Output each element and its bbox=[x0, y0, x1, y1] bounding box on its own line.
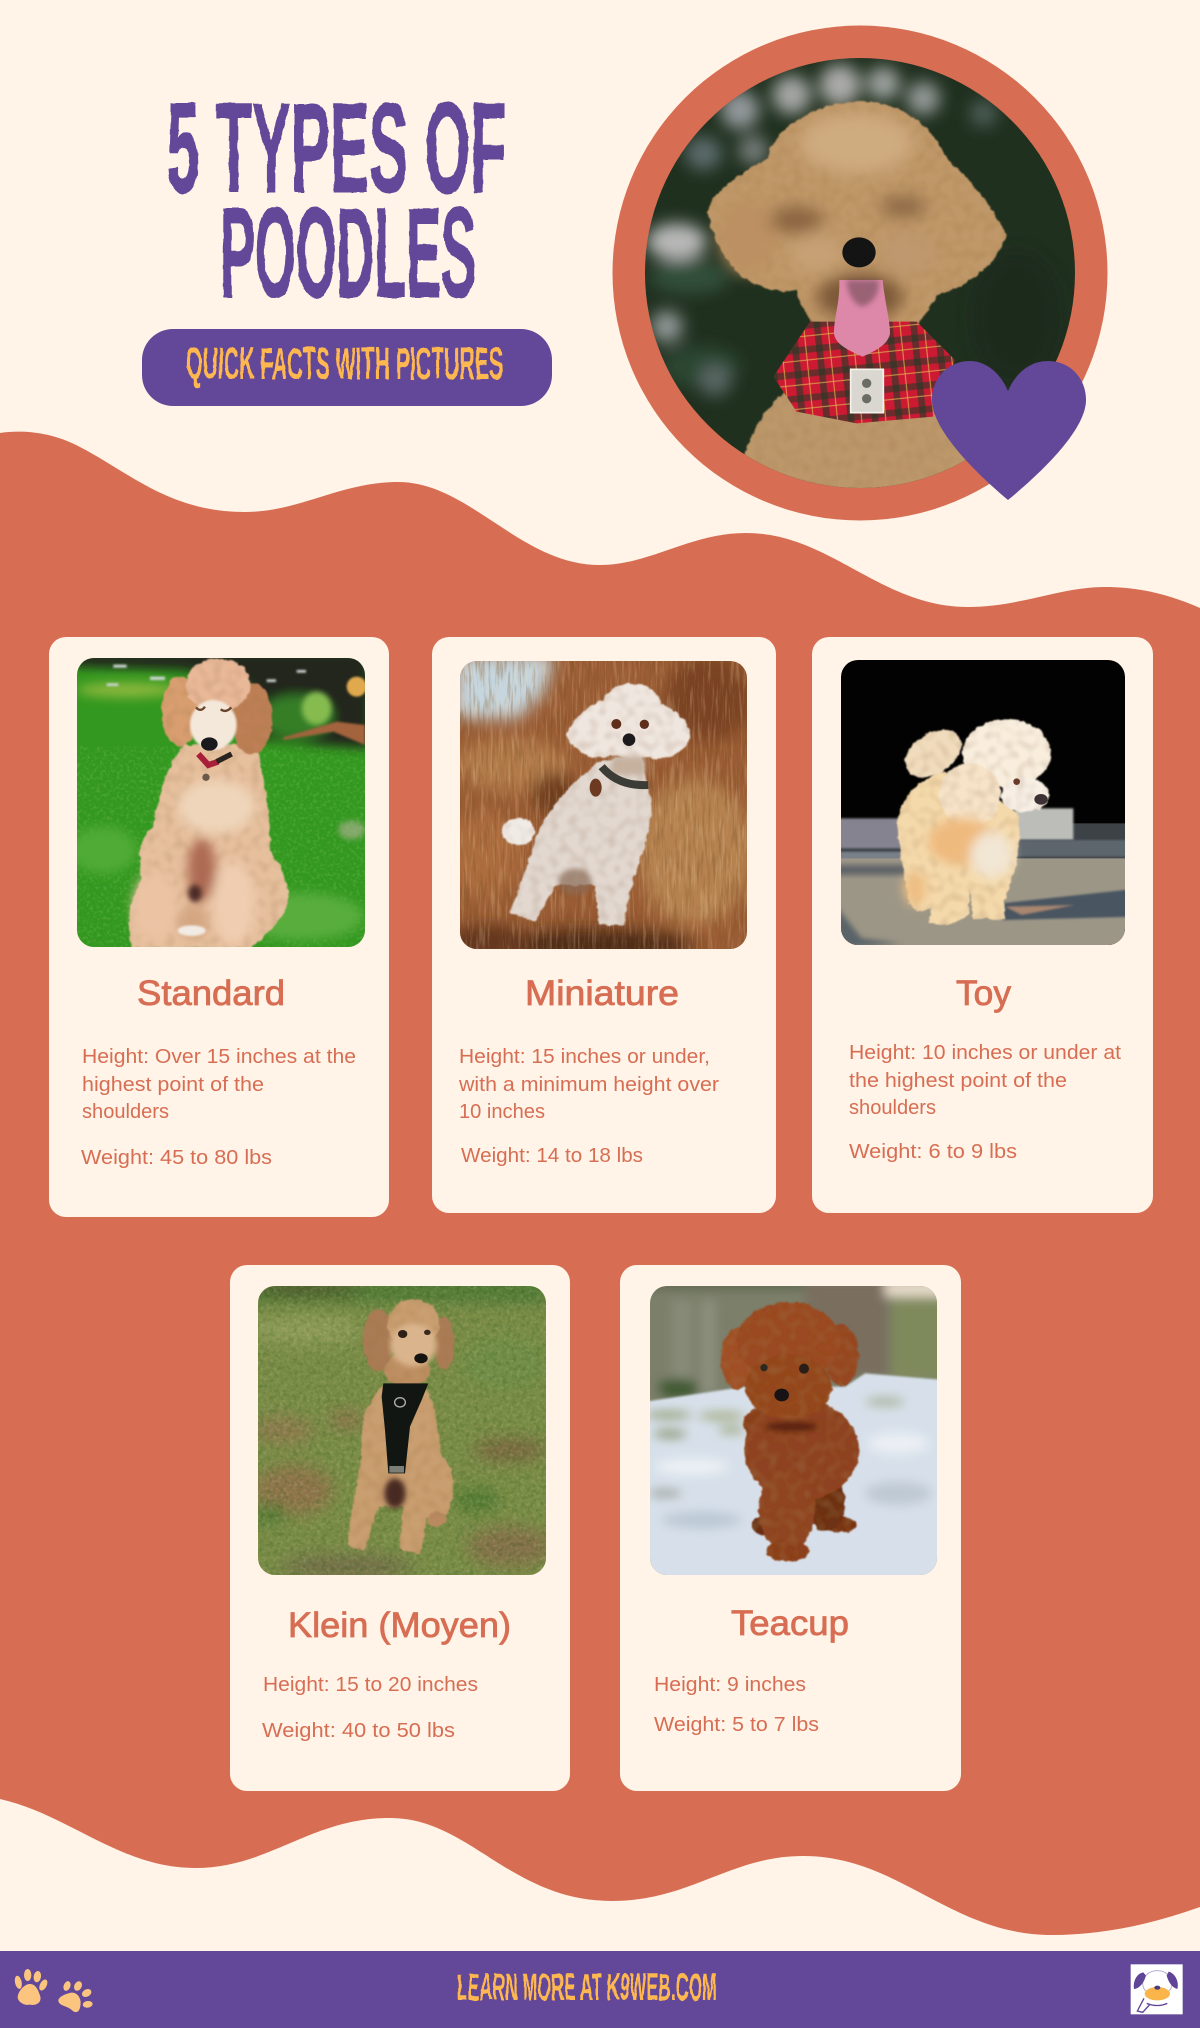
facts: Toy: Weight: 6 to 9 lbs bbox=[849, 1141, 1017, 1163]
panel: Miniature bbox=[432, 637, 776, 1213]
facts: Klein (Moyen): Height: 15 to 20 inches bbox=[263, 1674, 478, 1696]
panel: Standard bbox=[49, 637, 389, 1217]
icon: paw prints bbox=[14, 1969, 93, 2012]
footer bar: LEARN MORE AT K9WEB.COM bbox=[457, 1967, 717, 2009]
title bbox=[167, 77, 506, 325]
facts: Toy bbox=[849, 1042, 1121, 1163]
photo: klein poodle in a field bbox=[250, 1280, 553, 1580]
photo: teacup poodle in snow bbox=[645, 1280, 945, 1580]
facts: Klein (Moyen) bbox=[262, 1674, 478, 1742]
heading: Standard: Standard bbox=[137, 974, 285, 1013]
wavy terracotta background band bbox=[0, 432, 1200, 1935]
text: 5 TYPES OF bbox=[167, 77, 506, 220]
facts: Teacup: Weight: 5 to 7 lbs bbox=[654, 1714, 819, 1736]
facts: Miniature: Weight: 14 to 18 lbs bbox=[461, 1145, 643, 1167]
text: POODLES bbox=[220, 182, 476, 325]
facts: Miniature: 10 inches bbox=[459, 1101, 545, 1123]
panel: Toy bbox=[812, 637, 1153, 1213]
facts: Miniature: with a minimum height over bbox=[458, 1074, 719, 1096]
icon: k9web logo bbox=[1131, 1964, 1183, 2014]
heading: Miniature: Miniature bbox=[525, 974, 679, 1013]
subtitle pill: QUICK FACTS WITH PICTURES bbox=[186, 338, 503, 389]
panel: Teacup bbox=[620, 1265, 961, 1791]
facts: Toy: the highest point of the bbox=[849, 1070, 1067, 1092]
heading: Klein (Moyen): Klein (Moyen) bbox=[288, 1606, 511, 1645]
heading: Toy: Toy bbox=[956, 974, 1012, 1013]
facts: Teacup bbox=[654, 1674, 819, 1736]
facts: Standard bbox=[81, 1046, 356, 1169]
photo: toy poodle on pavement bbox=[841, 660, 1125, 945]
footer bar bbox=[0, 1951, 1200, 2028]
facts: Klein (Moyen): Weight: 40 to 50 lbs bbox=[262, 1720, 455, 1742]
facts: Miniature: Height: 15 inches or under, bbox=[459, 1046, 710, 1068]
photo: miniature poodle in dry grass bbox=[460, 661, 747, 949]
facts: Standard: highest point of the bbox=[82, 1074, 264, 1096]
panel: Klein (Moyen) bbox=[230, 1265, 570, 1791]
facts: Toy: Height: 10 inches or under at bbox=[849, 1042, 1121, 1064]
heading: Teacup: Teacup bbox=[731, 1604, 849, 1643]
hero portrait: circular photo of a poodle with bandana bbox=[612, 26, 1108, 520]
decorative heart bbox=[932, 361, 1086, 500]
photo: standard poodle on grass bbox=[70, 650, 370, 950]
subtitle pill bbox=[142, 329, 552, 406]
facts: Toy: shoulders bbox=[849, 1097, 936, 1119]
facts: Miniature bbox=[458, 1046, 719, 1167]
facts: Standard: Height: Over 15 inches at the bbox=[82, 1046, 356, 1068]
facts: Standard: Weight: 45 to 80 lbs bbox=[81, 1147, 272, 1169]
facts: Teacup: Height: 9 inches bbox=[654, 1674, 806, 1696]
facts: Standard: shoulders bbox=[82, 1101, 169, 1123]
